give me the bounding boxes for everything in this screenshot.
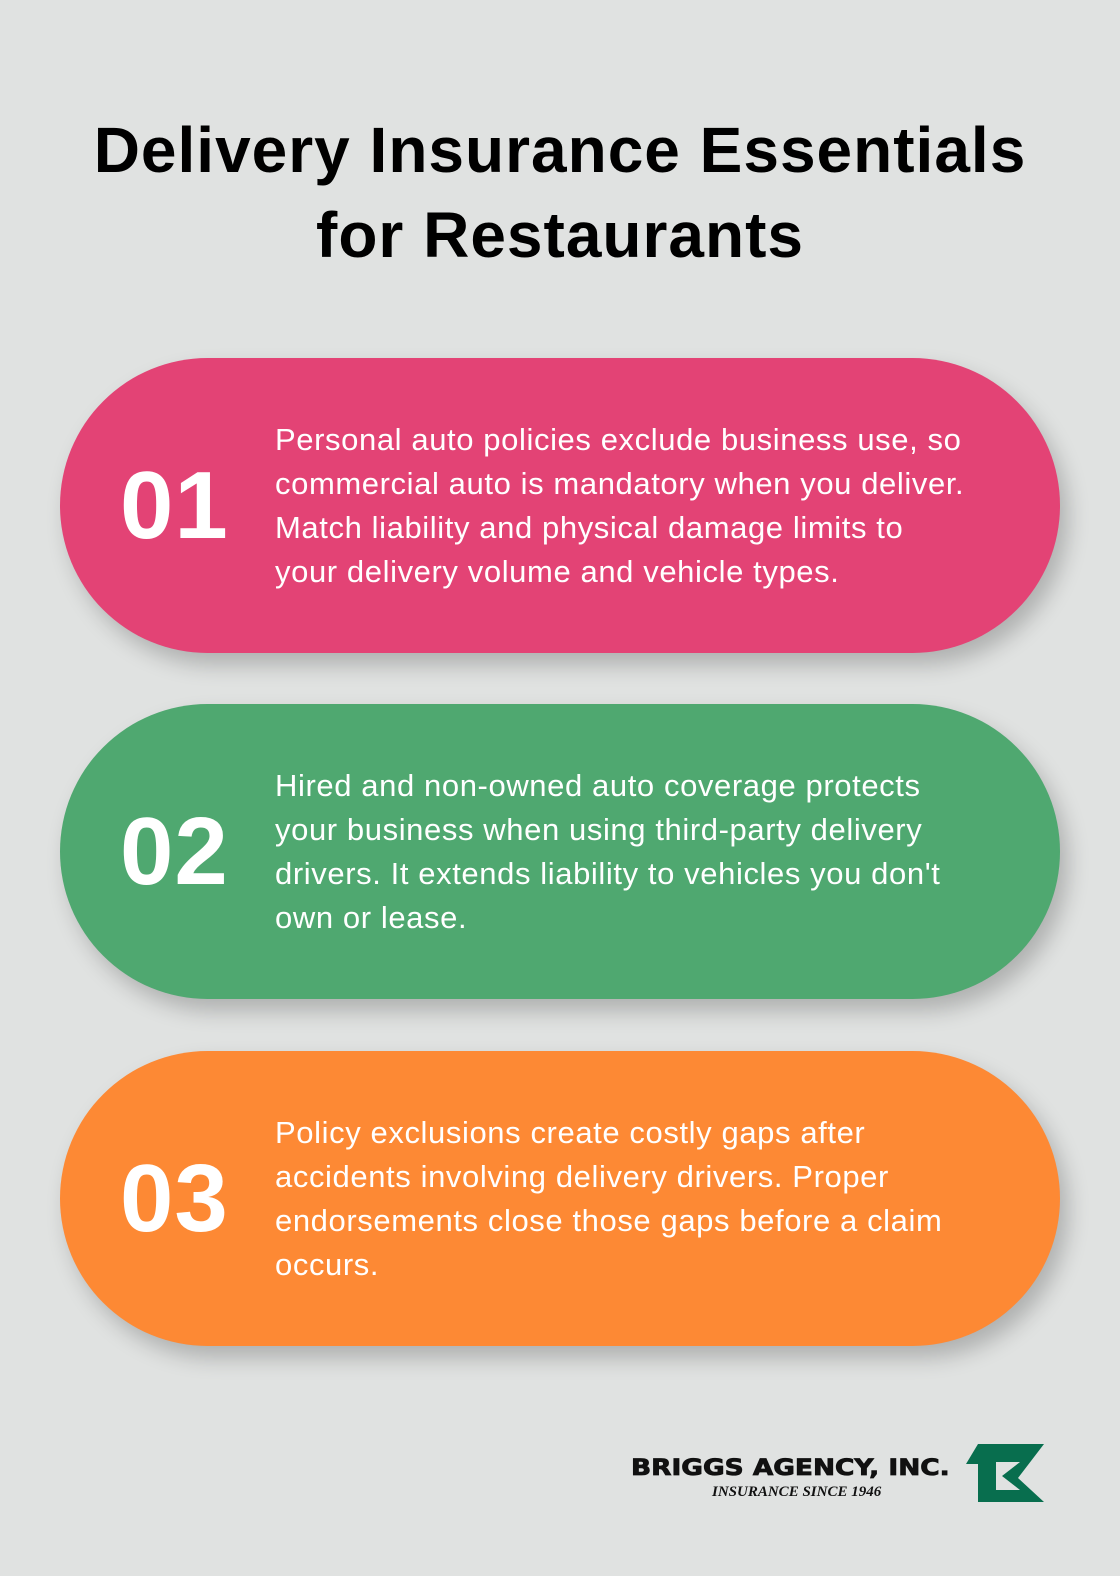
logo tagline: INSURANCE SINCE 1946 — [712, 1484, 881, 1500]
text 03: occurs. — [275, 1246, 379, 1282]
number 03: 03 — [120, 1145, 229, 1252]
title: Delivery Insurance Essentials — [94, 114, 1026, 186]
panel: 02 — [60, 704, 1060, 999]
text 01: Personal auto policies exclude business use, so — [275, 422, 961, 456]
logo text: BRIGGS AGENCY, INC. — [631, 1456, 950, 1481]
text 02: Hired and non-owned auto coverage protects — [275, 768, 921, 802]
text 01: Match liability and physical damage limits to — [275, 510, 903, 544]
text 03: Policy exclusions create costly gaps after — [275, 1114, 865, 1150]
logo — [631, 1444, 1044, 1502]
number 01: 01 — [120, 452, 229, 559]
text 02: own or lease. — [275, 900, 467, 934]
text 01 — [275, 422, 964, 588]
title: for Restaurants — [316, 199, 804, 271]
text 03: endorsements close those gaps before a claim — [275, 1202, 942, 1238]
text 03: accidents involving delivery drivers. Proper — [275, 1158, 889, 1194]
panel: 03 — [60, 1051, 1060, 1346]
text 02: your business when using third-party delivery — [275, 812, 922, 846]
icon: logo mark — [966, 1444, 1044, 1502]
text 02 — [275, 768, 940, 934]
number 02: 02 — [120, 798, 229, 905]
text 02: drivers. It extends liability to vehicles you don't — [275, 856, 940, 890]
title — [94, 114, 1026, 271]
text 03 — [275, 1114, 942, 1282]
text 01: commercial auto is mandatory when you deliver. — [275, 466, 964, 500]
text 01: your delivery volume and vehicle types. — [275, 554, 839, 588]
panel: 01 — [60, 358, 1060, 653]
